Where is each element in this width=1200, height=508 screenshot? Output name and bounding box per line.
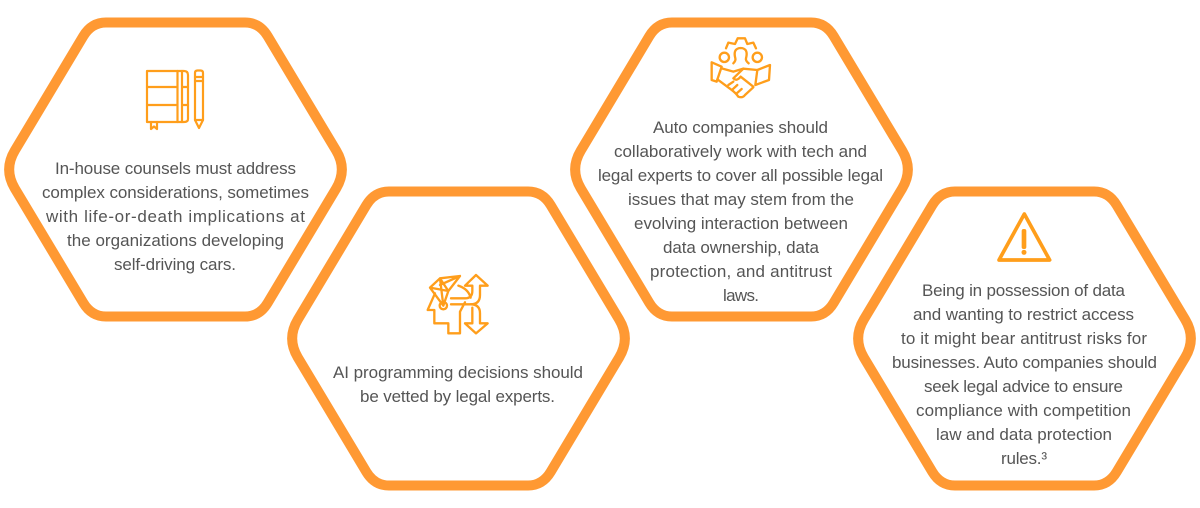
text: collaboration with experts: evolving interaction between [634,214,848,233]
text: in-house counsels: In-house counsels must address [55,159,296,178]
hexagon outline 2 [292,192,625,486]
text: collaboration with experts: data ownership, data [663,238,820,257]
hexagon outline 1 [9,22,342,316]
text: collaboration with experts: Auto companies should [653,118,828,137]
text: antitrust risks: businesses. Auto companies should [892,353,1157,372]
text: in-house counsels: self-driving cars. [114,255,236,274]
text: antitrust risks: and wanting to restrict access [913,305,1134,324]
text: collaboration with experts: issues that may stem from the [628,190,854,209]
text: collaboration with experts: collaboratively work with tech and [614,142,867,161]
panel: antitrust risks [858,192,1191,486]
hexagon outline 4 [858,192,1191,486]
text: antitrust risks: Being in possession of data [922,281,1126,300]
text: antitrust risks: compliance with competition [916,401,1131,420]
text: AI programming decisions [333,363,583,406]
hexagon outline 3 [575,22,908,316]
text: in-house counsels: complex considerations, sometimes [42,183,309,202]
text: antitrust risks: rules.³ [1001,449,1047,468]
icon: notebook and pencil [147,70,203,129]
panel: in-house counsels [9,22,342,316]
text: antitrust risks: to it might bear antitrust risks for [901,329,1147,348]
text: AI programming decisions: AI programming decisions should [333,363,583,382]
text: collaboration with experts: protection, and antitrust [650,262,832,281]
text: collaboration with experts: legal experts to cover all possible legal [598,166,883,185]
text: antitrust risks: seek legal advice to ensure [924,377,1123,396]
icon: handshake with team and gear [712,38,770,97]
text: collaboration with experts: laws. [723,286,759,305]
panel: AI programming decisions [292,192,625,486]
text: antitrust risks [892,281,1157,468]
text: collaboration with experts [598,118,883,305]
icon: warning triangle [999,214,1050,260]
icon: AI head with arrows [428,275,488,333]
text: in-house counsels [42,159,309,274]
text: in-house counsels: the organizations developing [67,231,284,250]
text: in-house counsels: with life-or-death implications at [45,207,305,226]
text: antitrust risks: law and data protection [936,425,1112,444]
panel: collaboration with experts [575,22,908,316]
text: AI programming decisions: be vetted by legal experts. [360,387,555,406]
